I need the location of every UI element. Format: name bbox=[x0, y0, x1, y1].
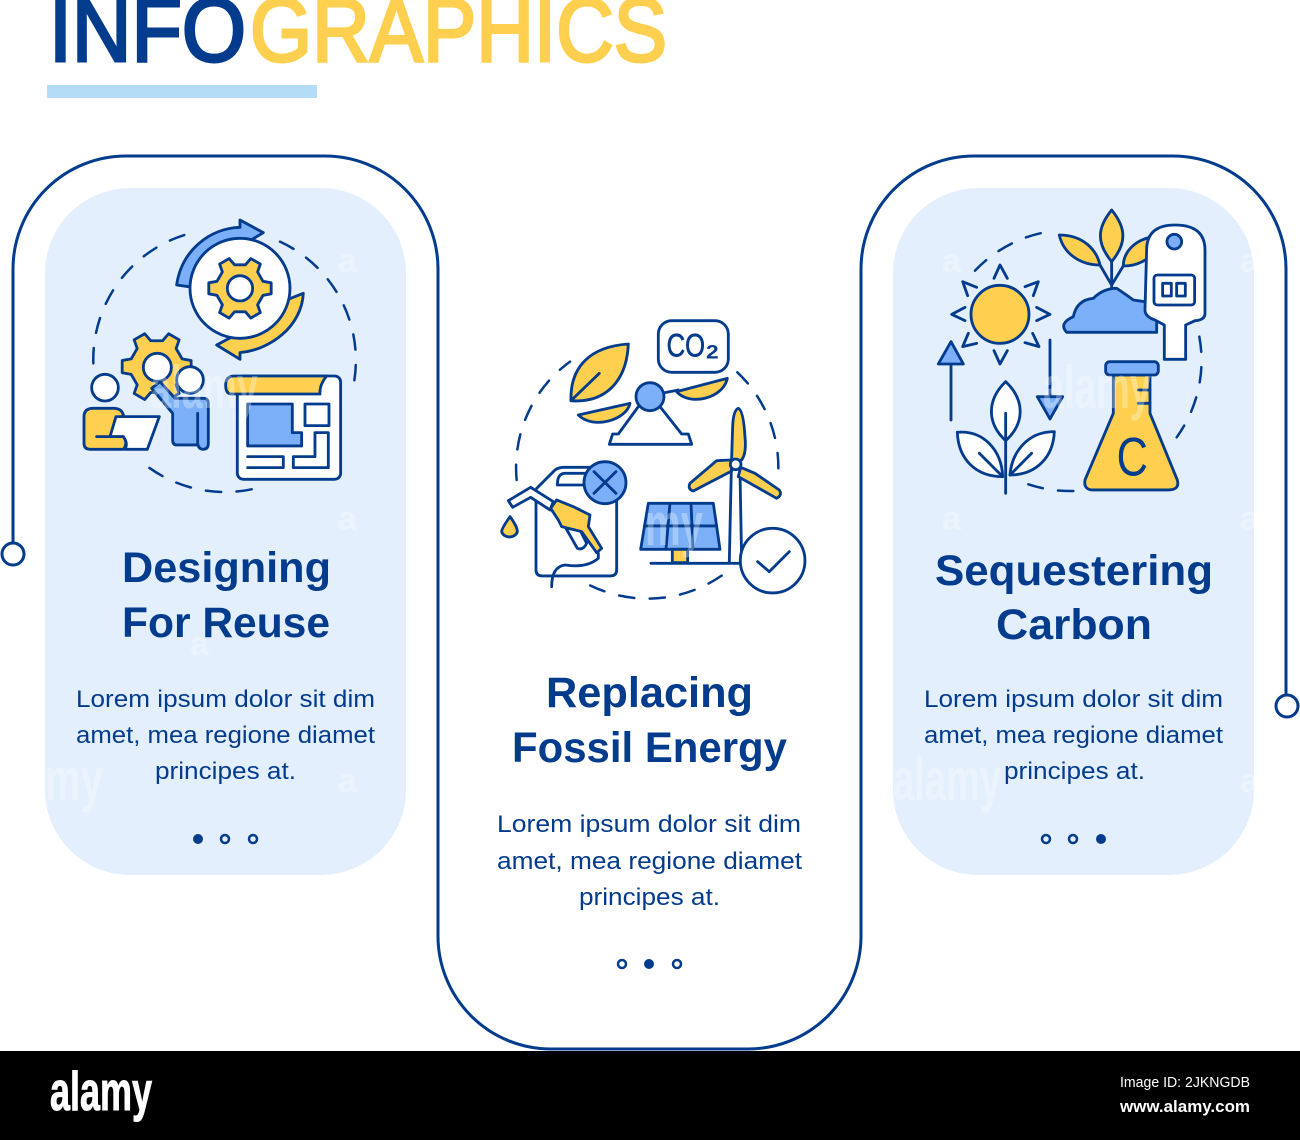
footer logo: alamy bbox=[50, 1060, 152, 1122]
watermarks: alamy bbox=[1043, 354, 1151, 421]
pagination dots bbox=[618, 959, 681, 969]
watermarks: a bbox=[338, 762, 358, 800]
watermarks: alamy bbox=[150, 354, 258, 421]
pagination dots bbox=[1042, 834, 1106, 844]
pagination dots bbox=[193, 834, 257, 844]
panel: sequestering carbon bbox=[924, 210, 1223, 844]
heading: Carbon bbox=[996, 601, 1152, 649]
title bbox=[49, 0, 667, 81]
icon: fossil to renewable energy: 2 bbox=[706, 343, 719, 364]
watermarks: a bbox=[1240, 500, 1260, 538]
panel: replacing fossil energy bbox=[497, 321, 805, 969]
text block: principes at. bbox=[1004, 758, 1145, 785]
heading: For Reuse bbox=[122, 599, 330, 647]
watermarks: my bbox=[645, 491, 703, 558]
heading bbox=[512, 669, 787, 772]
text block bbox=[924, 686, 1223, 785]
text block: principes at. bbox=[155, 758, 296, 785]
icon: reuse cycle and blueprint bbox=[84, 220, 356, 492]
text block: Lorem ipsum dolor sit dim bbox=[924, 686, 1223, 713]
footer bar bbox=[0, 1051, 1300, 1140]
text block bbox=[497, 811, 802, 911]
heading: Replacing bbox=[546, 669, 753, 717]
panel: sequestering carbon background bbox=[893, 188, 1254, 875]
text block: amet, mea regione diamet bbox=[497, 848, 802, 875]
website: www.alamy.com bbox=[1119, 1097, 1250, 1116]
icon: fossil to renewable energy: CO bbox=[667, 327, 705, 364]
watermarks bbox=[45, 242, 1260, 813]
image id: Image ID: 2JKNGDB bbox=[1120, 1074, 1250, 1091]
title underline bar bbox=[47, 85, 317, 98]
watermarks: a bbox=[1240, 762, 1260, 800]
text block: Lorem ipsum dolor sit dim bbox=[497, 811, 801, 838]
watermarks: a bbox=[338, 500, 358, 538]
icon: fossil to renewable energy bbox=[502, 321, 805, 599]
connecting outline frame bbox=[2, 156, 1298, 1049]
watermarks: alamy bbox=[893, 746, 1001, 813]
text block: amet, mea regione diamet bbox=[924, 722, 1223, 749]
panel: designing for reuse bbox=[76, 220, 375, 844]
heading: Sequestering bbox=[935, 547, 1213, 595]
watermarks: a bbox=[1240, 242, 1260, 280]
watermarks: my bbox=[45, 746, 103, 813]
watermarks: a bbox=[190, 625, 210, 663]
text block: principes at. bbox=[579, 884, 720, 911]
watermarks: a bbox=[942, 242, 962, 280]
watermarks: a bbox=[942, 500, 962, 538]
heading bbox=[122, 544, 331, 647]
text block: amet, mea regione diamet bbox=[76, 722, 375, 749]
panel: designing for reuse background bbox=[45, 188, 406, 875]
heading: Designing bbox=[122, 544, 331, 592]
watermarks: a bbox=[338, 242, 358, 280]
icon: carbon cycle, plants and flask bbox=[938, 210, 1205, 493]
heading: Fossil Energy bbox=[512, 724, 787, 772]
icon: carbon cycle, plants and flask: C bbox=[1117, 425, 1148, 487]
text block bbox=[76, 686, 375, 785]
heading bbox=[935, 547, 1213, 649]
text block: Lorem ipsum dolor sit dim bbox=[76, 686, 375, 713]
